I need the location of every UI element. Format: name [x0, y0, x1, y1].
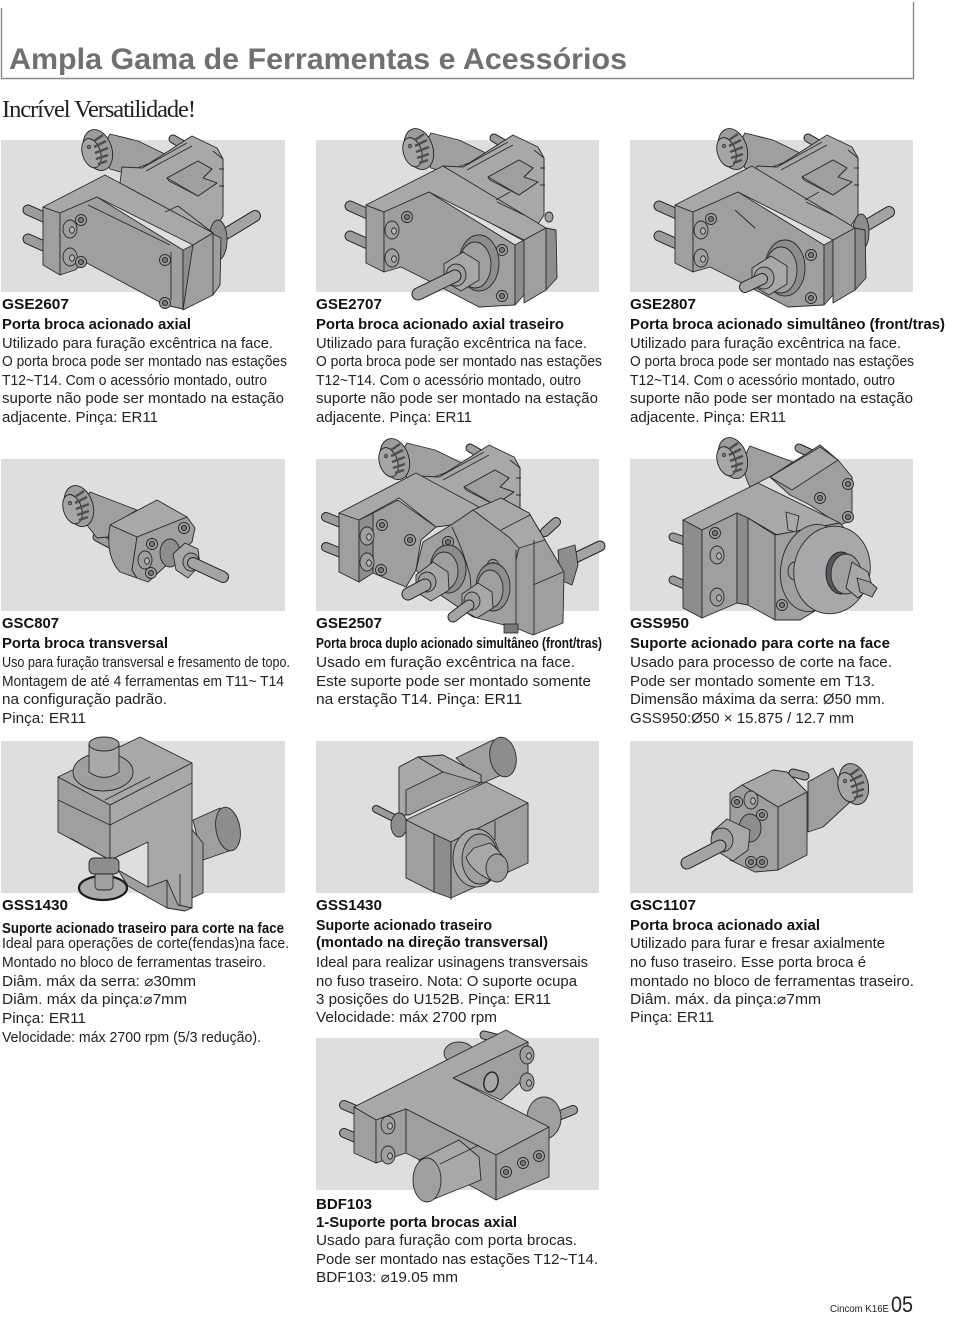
panel: GSE2507 — [316, 435, 602, 708]
illustration: GSC807 — [59, 482, 223, 582]
text block: GSS950: GSS950 — [630, 616, 689, 632]
text block: GSS950: Usado para processo de corte na face. — [630, 655, 892, 671]
text block: GSE2607: adjacente. Pinça: ER11 — [2, 410, 158, 426]
text block: GSC1107 — [630, 898, 914, 1026]
text block: GSE2807: adjacente. Pinça: ER11 — [630, 410, 786, 426]
text block: GSE2607: O porta broca pode ser montado nas estações — [2, 354, 287, 370]
panel: GSS950 — [630, 434, 913, 727]
text block: GSS1430 transversal: no fuso traseiro. Nota: O suporte ocupa — [316, 974, 578, 990]
text block: GSE2507 — [316, 616, 602, 708]
text block: GSS1430 saw: Suporte acionado traseiro para corte na face — [2, 921, 284, 937]
illustration: GSE2807 — [659, 125, 889, 307]
text block: GSE2807 — [630, 297, 945, 426]
panel: GSE2707 — [316, 125, 602, 426]
text block: GSC807: GSC807 — [2, 616, 59, 632]
text block: GSC1107: no fuso traseiro. Esse porta broca é — [630, 955, 866, 971]
text block: BDF103: 1-Suporte porta brocas axial — [316, 1215, 517, 1231]
text block: GSE2507: na erstação T14. Pinça: ER11 — [316, 692, 522, 708]
text block: GSS950: GSS950:Ø50 × 15.875 / 12.7 mm — [630, 711, 854, 727]
text block: BDF103: Usado para furação com porta brocas. — [316, 1233, 577, 1249]
text block: GSE2507: Porta broca duplo acionado simultâneo (front/tras) — [316, 636, 602, 652]
text block: GSE2507: Usado em furação excêntrica na face. — [316, 655, 575, 671]
text block: GSE2707: GSE2707 — [316, 297, 382, 313]
text block: GSS1430 transversal: Velocidade: máx 2700 rpm — [316, 1010, 497, 1026]
page header band — [2, 2, 914, 78]
text block: GSS1430 saw — [2, 898, 289, 1046]
text block: GSE2707: adjacente. Pinça: ER11 — [316, 410, 472, 426]
footer page mark: Cincom K16E — [830, 1304, 889, 1315]
illustration: GSE2607 — [28, 126, 255, 310]
text block: GSS1430 saw: Pinça: ER11 — [2, 1011, 86, 1027]
text block: GSE2707: suporte não pode ser montado na estação — [316, 391, 598, 407]
text block: GSE2707: T12~T14. Com o acessório montado, outro — [316, 373, 581, 389]
text block: GSC807: Porta broca transversal — [2, 636, 168, 652]
text block: GSE2707: Utilizado para furação excêntrica na face. — [316, 336, 587, 352]
panel: GSE2807 — [630, 125, 945, 426]
text block: GSC807 — [2, 616, 290, 727]
text block: GSE2707: Porta broca acionado axial traseiro — [316, 317, 564, 333]
subtitle: Incrível Versatilidade! — [2, 96, 196, 123]
text block: GSS1430 transversal: (montado na direção transversal) — [316, 935, 548, 951]
text block: GSC807: Pinça: ER11 — [2, 711, 86, 727]
panel: GSS1430 axial — [1, 737, 289, 1046]
illustration: GSS1430 saw — [58, 737, 244, 911]
text block: GSC1107: GSC1107 — [630, 898, 696, 914]
text block: GSS1430 saw: Velocidade: máx 2700 rpm (5/3 redução). — [2, 1030, 261, 1046]
text block: GSE2507: Este suporte pode ser montado somente — [316, 674, 591, 690]
text block: GSC1107: Pinça: ER11 — [630, 1010, 714, 1026]
panel: BDF103 — [316, 1030, 599, 1286]
text block: GSE2807: Utilizado para furação excêntrica na face. — [630, 336, 901, 352]
text block: GSE2607: GSE2607 — [2, 297, 69, 313]
text block: GSE2807: O porta broca pode ser montado nas estações — [630, 354, 914, 370]
text block: GSS1430 transversal: 3 posições do U152B. Pinça: ER11 — [316, 992, 551, 1008]
illustration: BDF103 — [344, 1030, 573, 1202]
illustration: GSC1107 — [687, 760, 874, 872]
illustration: GSE2507 — [326, 435, 600, 635]
text block: GSS1430 saw: Montado no bloco de ferramentas traseiro. — [2, 955, 266, 971]
panel: GSC807 — [1, 459, 290, 727]
text block: GSC807: na configuração padrão. — [2, 692, 167, 708]
title: Ampla Gama de Ferramentas e Acessórios — [9, 43, 627, 76]
illustration: GSS950 — [673, 434, 878, 621]
text block: GSE2607: suporte não pode ser montado na estação — [2, 391, 284, 407]
text block: GSE2807: Porta broca acionado simultâneo (front/tras) — [630, 317, 945, 333]
text block: GSS950: Suporte acionado para corte na face — [630, 636, 890, 652]
text block: BDF103: BDF103: ⌀19.05 mm — [316, 1270, 458, 1286]
text block: GSC1107: Utilizado para furar e fresar axialmente — [630, 936, 885, 952]
footer page mark: 05 — [891, 1292, 913, 1317]
text block: GSS1430 transversal: GSS1430 — [316, 898, 382, 914]
panel: GSE2607 — [1, 126, 287, 426]
text block: GSE2607: Porta broca acionado axial — [2, 317, 191, 333]
text block: GSS1430 saw: Ideal para operações de corte(fendas)na face. — [2, 936, 289, 952]
text block: GSE2707: O porta broca pode ser montado nas estações — [316, 354, 602, 370]
text block: GSE2607 — [2, 297, 287, 426]
text block: BDF103: Pode ser montado nas estações T12~T14. — [316, 1252, 598, 1268]
text block: GSS950: Pode ser montado somente em T13. — [630, 674, 875, 690]
text block: GSS1430 transversal: Suporte acionado traseiro — [316, 918, 492, 934]
text block: GSS1430 transversal — [316, 898, 588, 1026]
text block: GSE2507: GSE2507 — [316, 616, 382, 632]
text block: GSE2607: T12~T14. Com o acessório montado, outro — [2, 373, 267, 389]
text block: GSS1430 saw: Diâm. máx da pinça:⌀7mm — [2, 992, 187, 1008]
text block: GSS950: Dimensão máxima da serra: Ø50 mm. — [630, 692, 885, 708]
footer page mark — [830, 1292, 913, 1317]
illustration: GSS1430 transversal — [376, 735, 528, 900]
text block: GSC1107: Diâm. máx. da pinça:⌀7mm — [630, 992, 821, 1008]
text block: GSE2607: Utilizado para furação excêntrica na face. — [2, 336, 273, 352]
panel: GSS1430 transversal — [316, 735, 599, 1026]
text block: GSE2707 — [316, 297, 602, 426]
text block: GSC807: Uso para furação transversal e fresamento de topo. — [2, 655, 290, 671]
text block: GSS1430 saw: GSS1430 — [2, 898, 68, 914]
text block: GSS950 — [630, 616, 892, 727]
text block: GSS1430 transversal: Ideal para realizar usinagens transversais — [316, 955, 588, 971]
text block: GSC807: Montagem de até 4 ferramentas em T11~ T14 — [2, 674, 284, 690]
text block: GSS1430 saw: Diâm. máx da serra: ⌀30mm — [2, 974, 196, 990]
panel: GSC1107 — [630, 741, 914, 1026]
text block: BDF103: BDF103 — [316, 1197, 372, 1213]
text block: GSE2807: suporte não pode ser montado na estação — [630, 391, 913, 407]
text block: BDF103 — [316, 1197, 598, 1286]
text block: GSC1107: Porta broca acionado axial — [630, 918, 820, 934]
illustration: GSE2707 — [350, 125, 557, 307]
text block: GSE2807: GSE2807 — [630, 297, 696, 313]
text block: GSE2807: T12~T14. Com o acessório montado, outro — [630, 373, 895, 389]
text block: GSC1107: montado no bloco de ferramentas traseiro. — [630, 974, 914, 990]
